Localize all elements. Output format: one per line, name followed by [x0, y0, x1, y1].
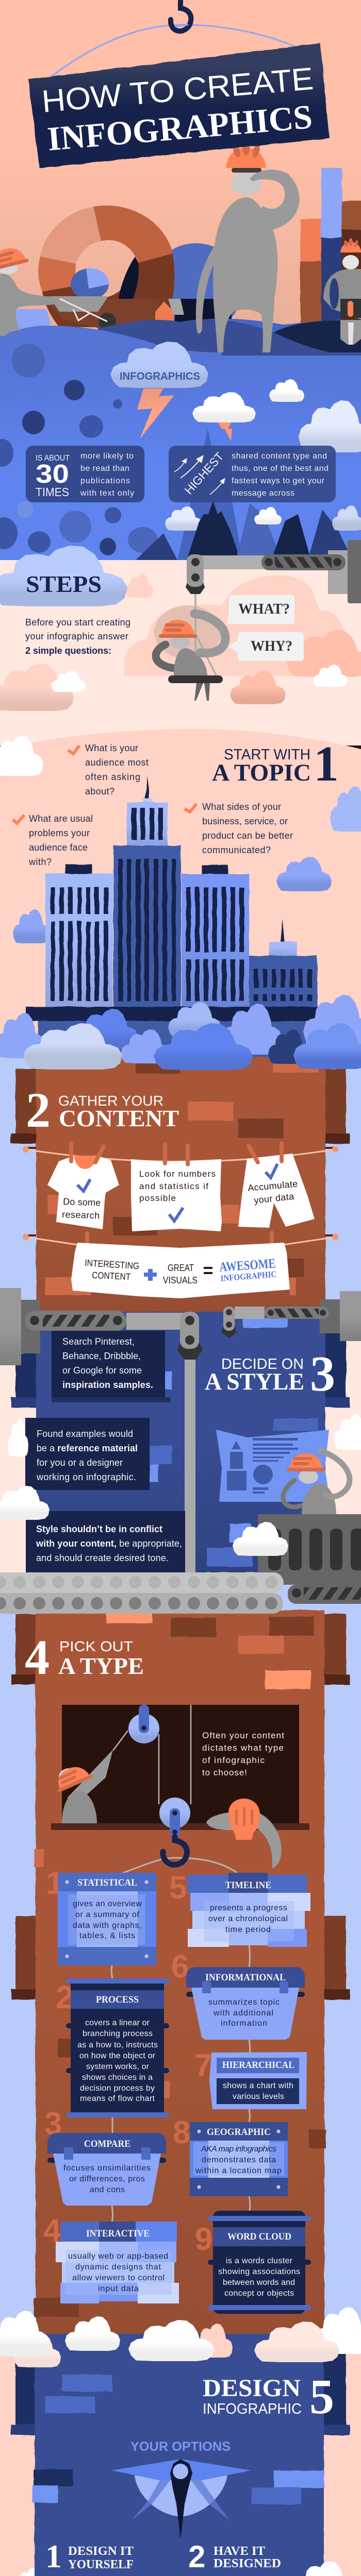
heading: decide on a style: DECIDE ON — [221, 1356, 304, 1372]
cloud: white top left — [0, 1486, 50, 1520]
speech bubble: what: WHAT? — [238, 601, 290, 617]
card 4: interactive — [43, 2213, 179, 2303]
cloud: white with small lightning — [192, 392, 256, 441]
times: TIMES — [36, 485, 69, 499]
heading: pick out a type: 4 — [25, 1630, 50, 1685]
text box: examples: for you or a designer — [37, 1458, 123, 1468]
text box: examples: Found examples would — [37, 1429, 133, 1439]
note: numbers and statistics — [131, 1159, 222, 1231]
clouds at step 3 — [8, 1414, 361, 1456]
30: 30 — [36, 459, 69, 488]
blue building: step 5 — [0, 2334, 361, 2576]
speech bubble: why: WHY? — [251, 638, 292, 654]
upper roller — [0, 1572, 284, 1593]
platform — [26, 1007, 322, 1021]
sheet — [216, 1430, 330, 1502]
heading: pick out a type: A TYPE — [58, 1653, 144, 1679]
orange drip pie slice — [155, 301, 174, 335]
chart: donut pie — [38, 206, 174, 327]
room text: to choose! — [202, 1768, 247, 1777]
card 3: compare: COMPARE — [84, 2139, 130, 2149]
box — [169, 446, 336, 502]
left arm — [156, 645, 174, 668]
heading: start with a topic 1: START WITH — [224, 747, 310, 763]
joint — [187, 554, 204, 587]
type cards — [43, 1866, 311, 2314]
text box: style: with your content, be appropriate, — [36, 1538, 182, 1549]
card 2: process: system works, or — [86, 2062, 150, 2071]
description: message across — [232, 489, 294, 498]
checklist: audience asking: about? — [85, 786, 114, 796]
card 2: process: as a how to, instructs — [77, 2041, 158, 2049]
machine arm over steps — [186, 540, 361, 603]
steps intro text — [25, 617, 130, 656]
plus — [144, 1269, 157, 1281]
checklist: sides of business — [185, 802, 293, 855]
t-shirt: do some research: Do some — [63, 1196, 101, 1208]
heading: start with a topic 1: 1 — [314, 736, 339, 792]
equals — [204, 1267, 212, 1274]
lightning bolt — [137, 388, 174, 439]
worker: large holding sign — [196, 140, 300, 352]
background: pink band step 3 — [0, 1340, 361, 1577]
worker on swing — [156, 594, 225, 701]
right arm — [194, 614, 225, 653]
side columns — [15, 2354, 35, 2425]
card 4: interactive: allow viewers to control — [72, 2274, 165, 2282]
text box: search: Behance, Dribbble, — [62, 1351, 141, 1361]
card 6: informational: information — [221, 2019, 267, 2028]
blue building: step 3 — [11, 1312, 350, 1574]
grey tool — [168, 299, 184, 315]
card 2: process: shows choices in a — [82, 2073, 153, 2082]
card 7: hierarchical: various levels — [233, 2092, 284, 2101]
checklist: sides of business: product can be better — [202, 831, 293, 841]
cloud: right big — [299, 400, 361, 452]
bricks — [106, 1610, 153, 1623]
worker: pulling rope — [51, 1750, 113, 1823]
front mountains — [165, 501, 361, 560]
clouds over step 2 top — [0, 995, 361, 1070]
option 1 heading: YOURSELF — [68, 2558, 134, 2571]
card 1: statistical: STATISTICAL — [77, 1877, 137, 1888]
card 8: geographic: 8 — [173, 2115, 190, 2150]
head — [170, 635, 190, 649]
wall — [36, 1057, 325, 1315]
card 9: word cloud — [195, 2211, 311, 2314]
option 1 heading: DESIGN IT — [68, 2545, 134, 2558]
heading: decide on a style: A STYLE — [205, 1368, 304, 1395]
heading: gather your content: 2 — [26, 1082, 51, 1138]
card 5: timeline: 5 — [169, 1870, 187, 1906]
heading: pick out a type: PICK OUT — [59, 1638, 133, 1654]
your options label: YOUR OPTIONS — [130, 2439, 231, 2454]
bar chart: construction bars — [300, 168, 361, 335]
steps intro text: Before you start creating — [25, 617, 130, 628]
chart: blue pie behind worker — [150, 243, 242, 334]
side columns — [15, 1353, 36, 1397]
checklist: sides of business: communicated? — [202, 845, 271, 855]
checklist: usual problems: What are usual — [29, 814, 93, 824]
note: numbers and statistics: possible — [139, 1193, 176, 1203]
mountains — [136, 429, 242, 560]
card 3: compare — [44, 2106, 166, 2223]
option 2 heading: DESIGNED — [214, 2557, 281, 2570]
card 3: compare: 3 — [44, 2106, 62, 2142]
card 3: compare: and cons — [90, 2185, 125, 2194]
text box: examples: working on infographic. — [36, 1472, 136, 1482]
card 5: timeline: TIMELINE — [225, 1880, 271, 1891]
title sign — [28, 43, 330, 168]
card 8: geographic: GEOGRAPHIC — [207, 2127, 271, 2138]
worker: reading poster — [283, 1451, 350, 1515]
card 1: statistical — [46, 1866, 156, 1978]
t-shirt: do some research — [47, 1156, 119, 1229]
poster with layout sketch — [216, 1430, 330, 1502]
heading: start with a topic 1: A TOPIC — [212, 759, 311, 786]
card 3: compare: focuses onsimilarities — [63, 2164, 151, 2173]
is about: IS ABOUT — [36, 454, 70, 463]
label: INFOGRAPHICS — [120, 370, 200, 382]
note: numbers and statistics: and statistics if — [139, 1181, 208, 1191]
heading: design infographic 5: DESIGN — [203, 2375, 301, 2402]
background: blue stats band — [0, 352, 361, 560]
background: lavender band step 4 — [0, 1572, 361, 2335]
stat box: 30 times — [26, 446, 144, 502]
awesome infographic: INFOGRAPHIC — [220, 1269, 277, 1283]
dark room — [62, 1705, 299, 1823]
heading: design infographic 5: INFOGRAPHIC — [203, 2401, 302, 2417]
title line 2: INFOGRAPHICS — [46, 98, 314, 158]
hills behind the band — [0, 309, 361, 357]
brick wall: step 4 — [11, 1610, 350, 2339]
option 2 heading: HAVE IT — [214, 2545, 265, 2558]
machine arm: large left — [25, 1311, 203, 1360]
description — [232, 452, 329, 498]
dark shadow under scene — [175, 299, 232, 325]
text box: examples: be a reference material — [37, 1443, 138, 1453]
background: pink band step 5 — [0, 2334, 361, 2576]
card 1: statistical: gives an overview — [73, 1900, 142, 1908]
card 2: process: decision process by — [80, 2084, 155, 2093]
card 6: informational: summarizes topic — [208, 1998, 280, 2007]
legs — [194, 683, 210, 701]
small right building — [281, 919, 285, 942]
background: lavender band step 2 — [0, 1058, 361, 1367]
body — [174, 648, 207, 676]
lower roller — [0, 1593, 283, 1614]
worker: right small with drill — [323, 238, 361, 345]
note: numbers and statistics: Look for numbers — [139, 1169, 216, 1179]
card 1: statistical: data with graphs, — [73, 1921, 142, 1930]
bricks — [136, 1063, 180, 1074]
conveyor rollers — [0, 1572, 361, 1614]
ropes and pulleys — [113, 1705, 191, 1837]
arm bar — [198, 555, 329, 569]
side columns bottom — [15, 1916, 36, 1989]
wall — [36, 1610, 324, 2339]
lines — [26, 1149, 335, 1161]
card 5: timeline: presents a progress — [210, 1904, 287, 1912]
sign board — [28, 43, 330, 168]
heading: gather your content: CONTENT — [59, 1105, 179, 1131]
steps intro text: your infographic answer — [25, 631, 128, 641]
wall — [35, 2334, 324, 2576]
cloud — [192, 392, 256, 422]
option 2 heading: 2 — [188, 2539, 205, 2574]
main tower top — [145, 776, 149, 799]
banner: equation: VISUALS — [163, 1275, 198, 1285]
card 5: timeline: time period — [225, 1925, 271, 1934]
stat box: highest shared — [169, 446, 336, 502]
card 3: compare: or differences, pros — [69, 2175, 145, 2183]
text box: style — [26, 1511, 185, 1572]
background: sky header — [0, 0, 361, 361]
steps intro text: 2 simple questions: — [25, 646, 111, 656]
card 4: interactive: input data — [98, 2284, 139, 2293]
crane hook with sign rope — [52, 0, 296, 76]
checklist: audience asking: audience most — [85, 757, 149, 768]
card 9: word cloud: showing associations — [218, 2267, 300, 2276]
checklist: audience asking — [68, 743, 149, 796]
knobs — [23, 1146, 338, 1240]
arrows up — [174, 457, 224, 495]
icon: pen nib emblem — [112, 2459, 251, 2539]
checklist: audience asking: What is your — [85, 743, 138, 753]
text box: examples — [25, 1418, 150, 1490]
cloud — [110, 342, 208, 388]
title line 1: HOW TO CREATE — [40, 61, 315, 119]
speech bubble: why — [228, 632, 304, 661]
room text: dictates what type — [202, 1743, 284, 1753]
highest rotated: HIGHEST — [182, 450, 226, 497]
card 6: informational — [171, 1949, 305, 2054]
checklist: audience asking: often asking — [85, 772, 140, 782]
card 9: word cloud: is a words cluster — [226, 2257, 293, 2265]
chart: small blue pie — [71, 268, 109, 299]
hook with hanger — [123, 1837, 237, 1873]
text box: search: or Google for some — [62, 1365, 142, 1376]
card 9: word cloud: 9 — [195, 2222, 212, 2257]
text box: search — [52, 1331, 170, 1402]
banner: equation: CONTENT — [92, 1270, 131, 1282]
clouds behind wall — [14, 2568, 45, 2576]
banner: equation: INTERESTING — [85, 1258, 140, 1271]
heading: decide on a style — [205, 1346, 335, 1402]
description: thus, one of the best and — [232, 464, 329, 473]
card 8: geographic: within a location map — [195, 2166, 282, 2175]
triangle — [232, 1441, 241, 1449]
card 2: process: means of flow chart — [80, 2094, 155, 2103]
bricks — [32, 2375, 324, 2504]
cloud: white over machine — [233, 1522, 288, 1556]
speech bubble: what — [227, 595, 294, 624]
description: shared content type and — [232, 452, 327, 461]
pegs — [71, 1143, 282, 1251]
illustration: header construction scene — [0, 140, 361, 357]
card 5: timeline: over a chronological — [208, 1914, 288, 1923]
left block — [65, 865, 92, 874]
side columns — [15, 1069, 36, 1133]
card 8: geographic: AKA map infographics — [201, 2145, 276, 2154]
card 2: process: covers a linear or — [85, 2019, 150, 2027]
checklist: usual problems — [13, 814, 93, 867]
text box: search: inspiration samples. — [62, 1380, 153, 1390]
steps background clouds — [0, 573, 361, 711]
heading: start with a topic 1 — [212, 736, 339, 792]
cloud: infographics with lightning — [110, 342, 208, 439]
text box: style: and should create desired tone. — [36, 1553, 169, 1563]
card 2: process: branching process — [83, 2029, 153, 2038]
card 4: interactive: usually web or app-based — [68, 2252, 168, 2261]
card 9: word cloud: concept or objects — [224, 2289, 294, 2298]
holders — [26, 1147, 335, 1236]
card 8: geographic: demonstrates data — [202, 2156, 276, 2164]
ropes — [195, 594, 216, 675]
text box: search: Search Pinterest, — [62, 1336, 135, 1347]
card 1: statistical: or a summary of — [75, 1910, 140, 1919]
heading: pick out a type — [25, 1630, 144, 1685]
heading: decide on a style: 3 — [310, 1346, 335, 1402]
awesome infographic — [219, 1256, 277, 1283]
card 1: statistical: tables, & lists — [79, 1931, 135, 1940]
card 7: hierarchical: 7 — [194, 2048, 212, 2083]
room text: of infographic — [202, 1755, 265, 1765]
cloud: small white top — [269, 379, 304, 402]
card 6: informational: with additional — [213, 2009, 273, 2018]
heading: design infographic 5 — [203, 2369, 334, 2424]
side cylinders — [0, 1288, 361, 1365]
checklist: sides of business: business, service, or — [202, 816, 288, 826]
worker: left small with wheelbarrow — [0, 244, 57, 336]
t-shirt: do some research: research — [62, 1209, 100, 1221]
clouds around topic section — [0, 736, 361, 943]
circle — [253, 1465, 273, 1484]
card 2: process: PROCESS — [96, 1994, 139, 2005]
card 5: timeline — [169, 1870, 310, 1967]
cloud — [0, 546, 127, 606]
option 1 heading: 1 — [45, 2538, 62, 2574]
card 7: hierarchical — [194, 2048, 307, 2122]
background: steps band — [0, 560, 361, 745]
awesome infographic: AWESOME — [219, 1256, 276, 1275]
card 2: process: on how the object or — [79, 2052, 156, 2060]
description: publications — [80, 477, 130, 485]
illustration: city buildings — [26, 776, 322, 1057]
card 4: interactive: 4 — [43, 2213, 61, 2248]
wall — [348, 540, 361, 603]
worker: leaning top view — [206, 1799, 282, 1868]
banner: equation — [71, 1243, 290, 1298]
blocks — [230, 1452, 243, 1469]
card 6: informational: 6 — [171, 1949, 189, 1985]
background: topic hill — [0, 729, 361, 1058]
card 4: interactive: dynamic designs that — [75, 2263, 161, 2272]
card 2: process — [56, 1978, 169, 2117]
description: with text only — [80, 489, 134, 498]
right block — [202, 865, 228, 874]
clothesline — [23, 1143, 338, 1298]
clouds between step 4 and step 5 — [0, 2307, 361, 2367]
checklist: usual problems: audience face — [29, 842, 88, 853]
shorts: accumulate your data — [238, 1154, 315, 1228]
brick wall: step 2 — [11, 1057, 350, 1315]
text box: style: Style shouldn’t be in conflict — [36, 1524, 162, 1534]
heading: gather your content — [26, 1082, 179, 1138]
room text — [202, 1731, 284, 1777]
card 6: informational: INFORMATIONAL — [205, 1972, 286, 1983]
seat — [168, 675, 223, 683]
card 4: interactive: INTERACTIVE — [86, 2228, 150, 2239]
center block — [113, 845, 181, 1007]
banner: equation: GREAT — [168, 1263, 194, 1273]
card 7: hierarchical: shows a chart with — [223, 2081, 293, 2090]
side columns top — [15, 1614, 36, 1674]
option 1 heading — [45, 2538, 134, 2574]
description — [80, 452, 134, 498]
block — [328, 550, 348, 594]
card 8: geographic — [173, 2115, 288, 2211]
option 2 heading — [188, 2539, 281, 2574]
shorts: accumulate your data: Accumulate — [248, 1179, 298, 1193]
heading: gather your content: GATHER YOUR — [58, 1093, 163, 1109]
checklist: usual problems: with? — [28, 857, 52, 867]
heading: design infographic 5: 5 — [309, 2369, 334, 2424]
cloud with steps heading — [0, 546, 127, 606]
heading: STEPS — [26, 571, 102, 597]
checklist: sides of business: What sides of your — [202, 802, 281, 812]
description: fastest ways to get your — [232, 477, 325, 485]
card 1: statistical: 1 — [46, 1866, 63, 1901]
card 7: hierarchical: HIERARCHICAL — [222, 2060, 294, 2071]
card 9: word cloud: between words and — [223, 2278, 295, 2287]
wall — [36, 1312, 325, 1572]
text lines — [253, 1438, 298, 1494]
card 2: process: 2 — [56, 1980, 73, 2015]
bricks — [243, 1318, 288, 1328]
description: more likely to — [80, 452, 134, 461]
pole — [185, 1358, 195, 1574]
card 9: word cloud: WORD CLOUD — [227, 2231, 291, 2242]
checklist: usual problems: problems your — [29, 828, 90, 838]
description: be read than — [80, 464, 129, 473]
decorative blobs in blue band — [0, 344, 158, 555]
hatched piston — [261, 554, 346, 570]
helmet — [159, 620, 197, 638]
hatched band — [288, 1585, 361, 1604]
chuck — [186, 579, 205, 594]
lightning bolt — [218, 422, 232, 441]
machine arm: small right — [221, 1307, 329, 1338]
box — [26, 446, 144, 502]
room text: Often your content — [202, 1731, 284, 1740]
wheelbarrow — [46, 296, 160, 330]
shorts: accumulate your data: your data — [253, 1191, 295, 1206]
cloud: white right of options — [296, 2561, 352, 2576]
gray machine with vents — [258, 1514, 361, 1585]
